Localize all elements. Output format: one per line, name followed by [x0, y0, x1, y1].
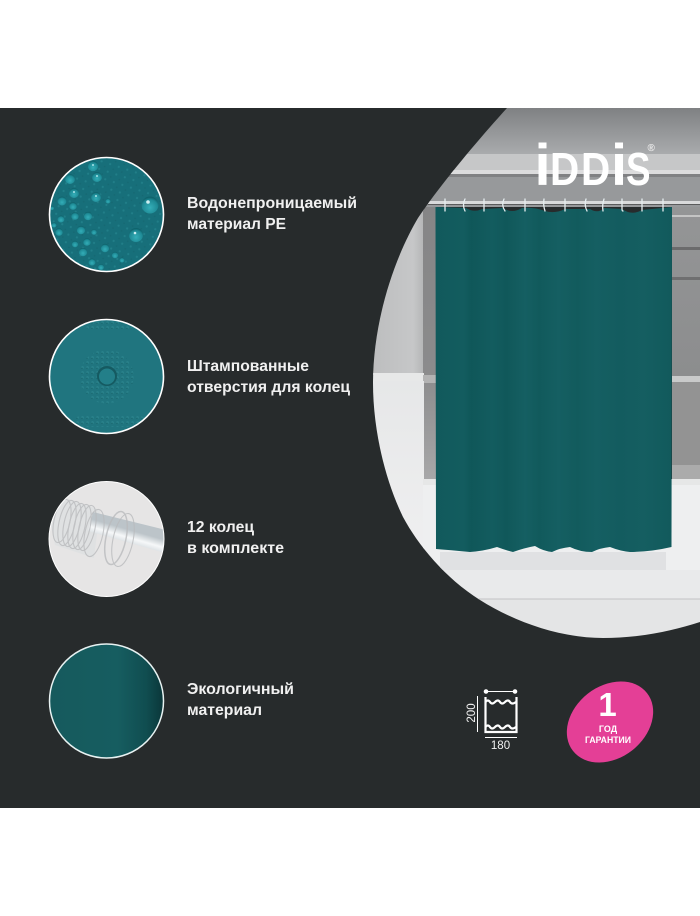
feature 4 photo: fabric	[50, 644, 164, 758]
feature 1 text	[187, 195, 357, 233]
height line	[476, 696, 478, 732]
warranty badge: ГОД	[599, 724, 618, 734]
registered mark: ®	[648, 143, 656, 154]
logo: IDDIS: D	[550, 145, 579, 196]
feature 4 text: материал	[187, 702, 262, 719]
feature 4 text	[187, 681, 294, 719]
ring stack backing	[50, 497, 100, 558]
feature 4 text: Экологичный	[187, 681, 294, 698]
height label: 200	[466, 703, 478, 723]
baseboard	[442, 570, 700, 599]
left niche	[423, 207, 437, 482]
ring stack	[52, 499, 134, 567]
curtain	[436, 207, 672, 552]
infographic canvas	[0, 108, 700, 808]
logo: IDDIS: i	[611, 133, 627, 198]
bathroom scene with curtain	[370, 108, 700, 649]
floor	[478, 598, 700, 638]
feature 2 photo: stamped hole	[48, 318, 166, 436]
icon curtain	[486, 697, 516, 732]
icon rod	[484, 690, 517, 693]
dark panel	[0, 108, 700, 808]
warranty badge: 1	[598, 686, 617, 723]
left wall	[370, 207, 424, 375]
feature 3 text: в комплекте	[187, 540, 284, 557]
curtain shadow on bath	[440, 552, 666, 570]
left tiles	[373, 381, 424, 549]
left ledge	[373, 373, 436, 383]
feature 2 text	[187, 358, 350, 396]
feature 2 text: Штампованные	[187, 358, 309, 375]
curtain rings	[445, 199, 663, 211]
rod	[88, 512, 164, 550]
feature 1 text: Водонепроницаемый	[187, 195, 357, 212]
feature 1 text: материал PE	[187, 216, 286, 233]
back wall	[426, 177, 700, 207]
feature 1 photo: water drops	[48, 156, 166, 274]
logo: IDDIS: S	[626, 143, 651, 195]
logo: IDDIS: D	[581, 145, 610, 196]
bath front	[423, 485, 700, 570]
feature 3 text: 12 колец	[187, 519, 254, 536]
logo: IDDIS: i	[534, 133, 551, 198]
width label: 180	[491, 740, 510, 752]
right wall with shelves	[672, 207, 700, 480]
cornice	[448, 154, 700, 177]
curtain rod	[428, 201, 700, 205]
ceiling	[467, 108, 700, 154]
feature 2 text: отверстия для колец	[187, 379, 350, 396]
icon: curtain dimensions	[466, 690, 517, 752]
width line	[485, 736, 517, 738]
feature 3 photo: rings on rod	[48, 480, 170, 598]
feature 3 text	[187, 519, 284, 557]
logo: IDDIS	[534, 133, 656, 198]
bath rim	[423, 479, 700, 485]
warranty badge: ГАРАНТИИ	[585, 735, 631, 745]
warranty badge	[551, 665, 669, 779]
